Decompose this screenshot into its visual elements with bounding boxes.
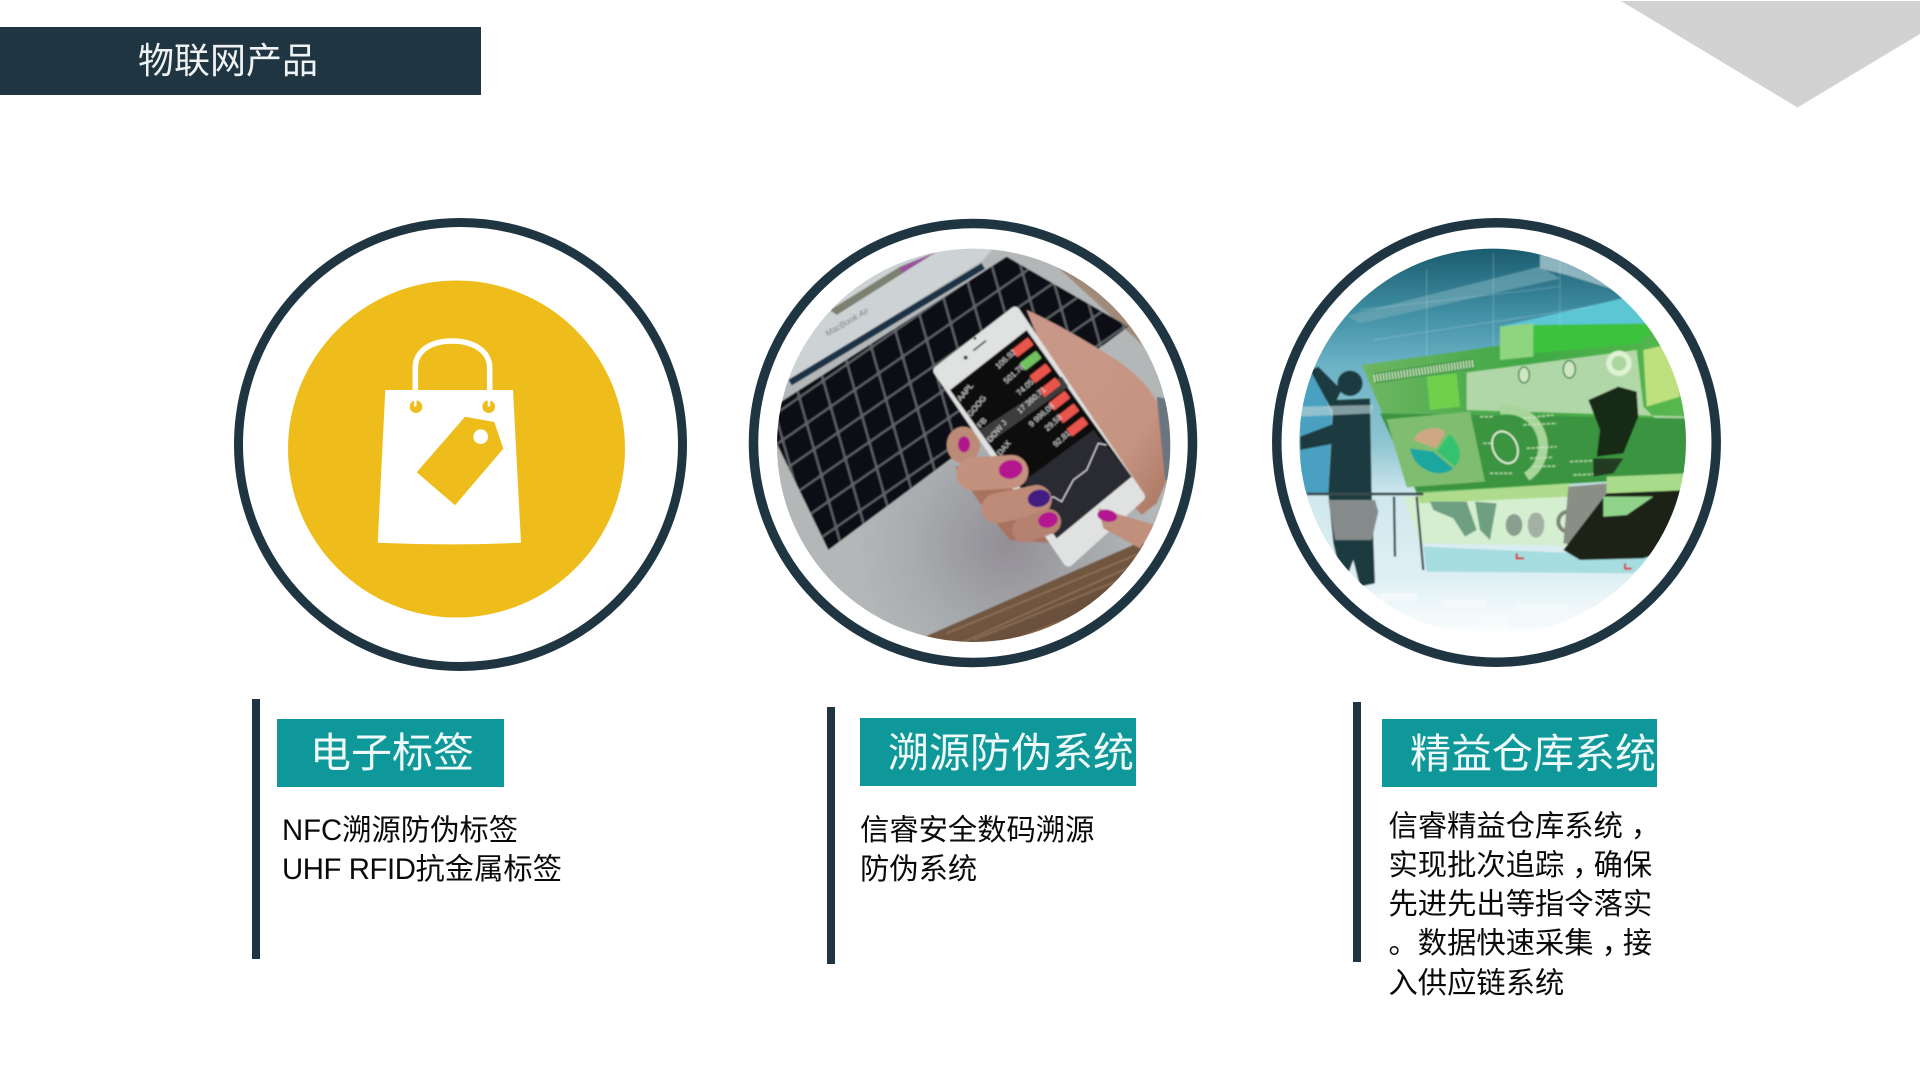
panel: lean warehouse system — [1272, 218, 1721, 1000]
photo: hand holding phone over laptop: 17 360,71 — [1015, 385, 1048, 415]
heading: 精益仓库系统 — [1382, 719, 1657, 787]
text: warehouse description — [1388, 810, 1660, 1000]
text: warehouse description: 先进先出等指令落实 — [1388, 888, 1652, 921]
photo: hand holding phone over laptop: FB — [975, 416, 989, 430]
photo: hand holding phone over laptop: 92,81 — [1051, 428, 1073, 449]
header bar with title — [0, 27, 481, 95]
heading: 电子标签 — [277, 719, 504, 787]
photo: hand holding phone over laptop: DAX — [995, 438, 1013, 457]
text: tag products: NFC溯源防伪标签 — [282, 814, 518, 847]
header bar with title: 物联网产品 — [138, 40, 318, 81]
photo: hand holding phone over laptop — [748, 218, 1198, 668]
heading: 溯源防伪系统 — [860, 718, 1136, 786]
text: traceability description: 防伪系统 — [860, 853, 977, 886]
heading: 电子标签: 电子标签 — [310, 730, 474, 776]
icon: shopping bag with tag in ring — [234, 218, 687, 671]
vertical accent bar — [1353, 702, 1361, 962]
text: warehouse description: 入供应链系统 — [1388, 967, 1564, 1000]
text: warehouse description: 。数据快速采集 ，接 — [1388, 927, 1652, 960]
text: warehouse description: 信睿精益仓库系统 ， — [1388, 810, 1660, 842]
photo: hand holding phone over laptop: 9 996,08 — [1027, 401, 1057, 429]
heading: 精益仓库系统: 精益仓库系统 — [1410, 731, 1656, 777]
panel: electronic tags — [234, 218, 687, 959]
photo: hand holding phone over laptop: AAPL — [955, 381, 976, 403]
text: tag products — [282, 814, 562, 886]
text: warehouse description: 实现批次追踪 ，确保 — [1388, 849, 1652, 882]
text: tag products: UHF RFID抗金属标签 — [282, 853, 562, 886]
vertical accent bar — [252, 699, 260, 959]
panel: traceability system — [748, 218, 1198, 964]
photo: hand holding phone over laptop: 74.05 — [1015, 377, 1036, 397]
photo: hand holding phone over laptop: DOW J — [985, 418, 1009, 444]
text: traceability description: 信睿安全数码溯源 — [860, 814, 1094, 846]
photo: hand holding phone over laptop: GOOG — [965, 394, 988, 419]
vertical accent bar — [827, 707, 835, 964]
decorative corner triangle — [1621, 1, 1920, 108]
photo: hand holding phone over laptop: 29,58 — [1043, 412, 1064, 433]
photo: hand holding phone over laptop: 501.78 — [1002, 362, 1027, 385]
photo: silhouettes with green data screens — [1272, 218, 1721, 667]
photo: hand holding phone over laptop: MacBook Air — [823, 305, 872, 338]
text: traceability description — [860, 814, 1094, 886]
photo: hand holding phone over laptop: 106.92 — [994, 347, 1018, 371]
heading: 溯源防伪系统: 溯源防伪系统 — [888, 730, 1134, 776]
